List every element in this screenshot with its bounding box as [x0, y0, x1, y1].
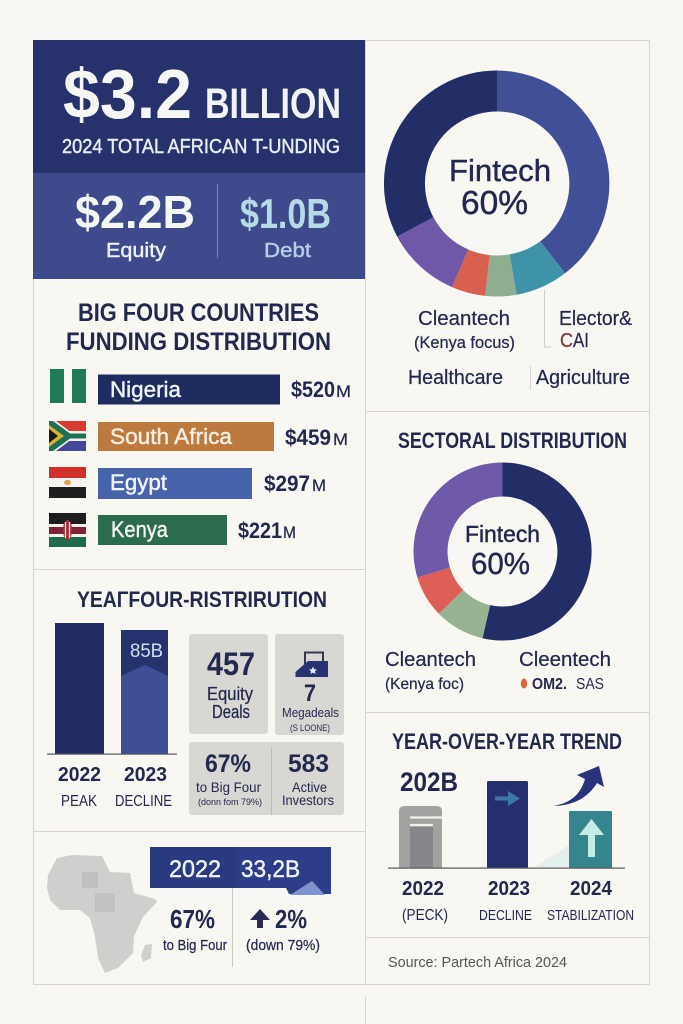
label: healthcare: Healthcare — [408, 367, 503, 389]
card: big four share and investors: 583 — [288, 750, 329, 778]
value: Kenya: M — [283, 523, 296, 542]
headline unit: BILLION — [205, 80, 341, 128]
bar: Egypt: Egypt — [110, 470, 167, 495]
year labels: 2024 — [570, 878, 613, 900]
card: equity deals: Equity — [207, 684, 253, 704]
label: cleantech right — [519, 649, 611, 693]
label: electoral and CAI: C — [560, 330, 573, 352]
panel: sectoral distribution — [385, 428, 627, 693]
heading: BIG FOUR COUNTRIES — [78, 299, 319, 327]
label: cleantech right: OM2. — [532, 676, 567, 693]
stat: big four share: to Big Four — [163, 938, 227, 954]
donut chart: sectors overview — [384, 70, 609, 297]
headline caption: 2024 TOTAL AFRICAN T-UNDING — [62, 136, 340, 158]
heading: FUNDING DISTRIBUTION — [66, 328, 331, 356]
year labels: 2023 — [488, 878, 530, 900]
card: big four share and investors: Investors — [282, 792, 334, 808]
bar: Egypt — [98, 468, 252, 499]
banner: 2022 total: 33,2B — [241, 856, 300, 883]
year labels — [402, 878, 634, 924]
card: equity deals — [189, 634, 268, 734]
label: electoral and CAI — [559, 308, 633, 352]
bar chart: 2022 vs 2023: PEAK — [61, 793, 97, 810]
bar chart: 2022 vs 2023: 2023 — [124, 764, 167, 786]
donut chart: sectors — [414, 462, 592, 640]
label: electoral and CAI: AI — [573, 330, 589, 352]
banner: 2022 total — [150, 847, 331, 895]
card: megadeals: 7 — [304, 680, 316, 707]
icon: Kenya flag — [49, 513, 86, 547]
equity label: Equity — [106, 240, 166, 262]
bar: Kenya: Kenya — [111, 517, 169, 542]
bar chart: 2022 vs 2023: DECLINE — [115, 793, 172, 810]
value: 2022 total: 202B — [400, 767, 458, 797]
headline amount: $3.2 — [63, 55, 192, 133]
value: Egypt: $297 — [264, 471, 310, 496]
panel: big four countries — [49, 299, 351, 547]
panel: total funding header — [33, 40, 365, 173]
stat: big four share — [163, 904, 227, 954]
debt label: Debt — [264, 240, 311, 262]
card: megadeals — [275, 634, 344, 735]
card: big four share and investors: Active — [292, 779, 327, 795]
label: cleantech right: SAS — [576, 676, 604, 693]
bar: 2023 with arrow — [487, 781, 528, 868]
bar: South Africa — [98, 422, 274, 451]
heading: SECTORAL DISTRIBUTION — [398, 428, 627, 453]
donut center label: 60% — [471, 546, 530, 581]
stat: change: 2% — [275, 904, 307, 934]
donut center label: Fintech — [449, 153, 551, 188]
value: South Africa: M — [333, 430, 348, 449]
card: equity deals: 457 — [207, 646, 255, 682]
value: Kenya: $221 — [238, 518, 282, 543]
icon: Africa map — [47, 855, 157, 973]
card: big four share and investors — [189, 742, 344, 815]
arrow: upward trend — [553, 766, 604, 806]
panel: year and deal statistics — [47, 587, 344, 815]
label: cleantech left: (Kenya foc) — [385, 676, 464, 693]
bar: Nigeria — [98, 374, 280, 404]
label: cleantech — [414, 308, 515, 352]
year labels: STABILIZATION — [547, 907, 634, 924]
card: big four share and investors: to Big Four — [196, 779, 261, 795]
stat: big four share: 67% — [170, 904, 215, 934]
label: electoral and CAI: Elector& — [559, 308, 633, 330]
stat: change — [246, 904, 320, 954]
icon: Nigeria flag — [50, 369, 86, 403]
year labels: 2022 — [402, 878, 444, 900]
debt amount: $1.0B — [240, 190, 331, 237]
panel: Africa summary — [47, 847, 331, 973]
value: South Africa: $459 — [285, 425, 331, 450]
stat: change: (down 79%) — [246, 937, 320, 954]
bar chart: 2022 vs 2023: 85B — [130, 641, 163, 662]
bar chart: 2022 vs 2023 — [47, 623, 177, 810]
bar: South Africa: South Africa — [110, 424, 233, 449]
card: megadeals: (S LOONE) — [290, 723, 330, 733]
year labels: (PECK) — [402, 907, 448, 924]
card: big four share and investors: 67% — [205, 750, 251, 778]
value: Nigeria: $520 — [291, 377, 335, 402]
label: cleantech right: Cleentech — [519, 649, 611, 671]
panel: top donut — [384, 70, 633, 390]
panel: year-over-year trend — [388, 729, 634, 924]
banner: 2022 total: 2022 — [169, 856, 221, 883]
label: cleantech: Cleantech — [418, 308, 510, 330]
donut center label — [449, 153, 551, 221]
donut center label — [465, 521, 540, 581]
panel: equity and debt split — [33, 173, 365, 279]
card: big four share and investors: (donn fom 79%) — [198, 797, 262, 808]
donut center label: Fintech — [465, 521, 540, 547]
value: Nigeria: M — [336, 382, 351, 401]
bar: Kenya — [98, 515, 227, 545]
heading: YEAR-OVER-YEAR TREND — [392, 729, 622, 754]
card: megadeals: Megadeals — [282, 705, 339, 720]
heading: YEAΓFOUR-RISTRIRUTION — [77, 587, 327, 612]
light growth wedge — [535, 845, 569, 867]
icon: South Africa flag — [49, 421, 86, 451]
icon: megadeal badge — [296, 652, 328, 677]
icon: Egypt flag — [49, 467, 86, 498]
equity amount: $2.2B — [75, 186, 195, 238]
year labels: DECLINE — [479, 907, 532, 924]
donut center label: 60% — [461, 184, 528, 221]
source note: Source: Partech Africa 2024 — [388, 954, 567, 971]
label: cleantech left — [385, 649, 476, 693]
bar chart: 2022 vs 2023: 2022 — [58, 764, 101, 786]
label: cleantech left: Cleantech — [385, 649, 476, 671]
bar: Nigeria: Nigeria — [110, 377, 182, 402]
label: agriculture: Agriculture — [536, 367, 630, 389]
card: equity deals: Deals — [212, 702, 250, 722]
value: Egypt: M — [312, 476, 326, 495]
bar: 2022 — [399, 806, 442, 868]
label: cleantech: (Kenya focus) — [414, 334, 515, 352]
heading — [66, 299, 331, 356]
bar: 2024 with up arrow — [569, 811, 612, 868]
